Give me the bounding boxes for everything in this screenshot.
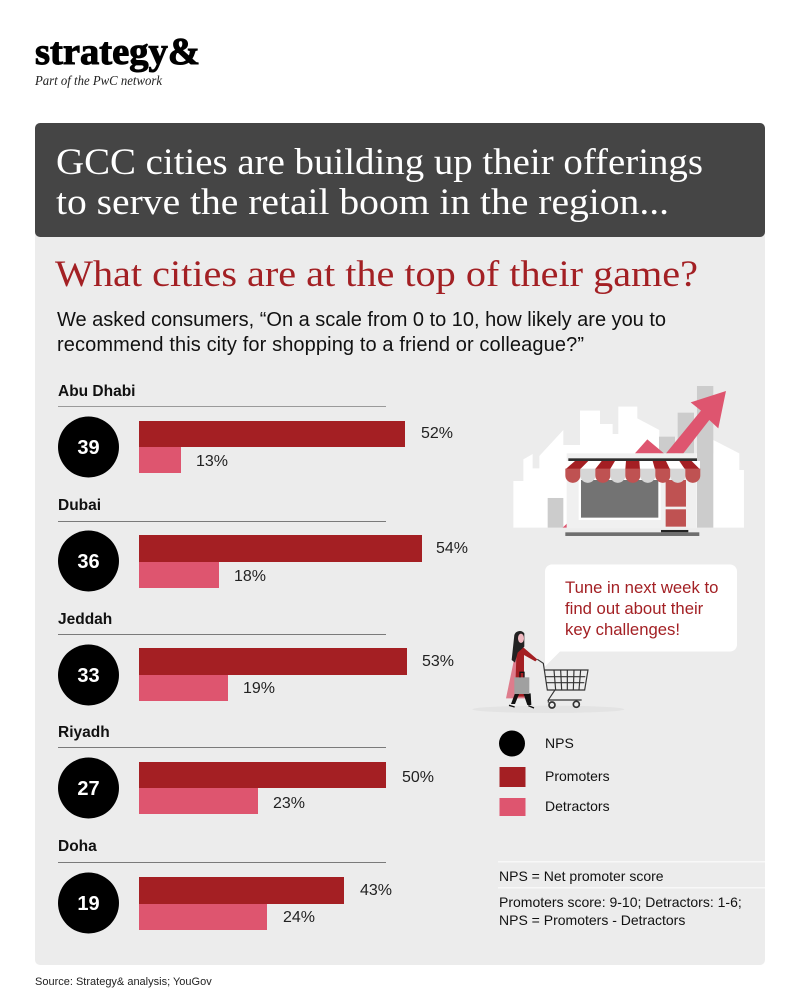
city row: Jeddah: 33 [77,665,100,687]
city row: Riyadh: 50% [402,769,434,786]
intro text: We asked consumers, “On a scale from 0 to 10, how likely are you to [57,309,666,331]
notes: NPS = Net promoter score [499,868,664,884]
city row: Abu Dhabi: 52% [421,425,453,442]
intro text: recommend this city for shopping to a friend or colleague?” [57,334,584,356]
city row: Dubai: 54% [436,540,468,557]
city row: Dubai: 18% [234,568,266,585]
city row: Dubai: Dubai [58,497,101,514]
callout: speech bubble [545,564,737,666]
callout: speech bubble: key challenges! [565,620,680,639]
title banner: to serve the retail boom in the region... [56,181,669,222]
city row: Doha: Doha [58,838,97,855]
title banner: GCC cities are building up their offerings [56,141,703,182]
main grey panel [35,200,765,965]
city row: Riyadh: 23% [273,795,305,812]
legend: Detractors [545,798,610,814]
city row: Riyadh: 27 [77,778,100,800]
city row: Doha: 24% [283,909,315,926]
city row: Doha: 19 [77,893,100,915]
intro text [57,309,666,356]
city row: Dubai: 36 [77,551,100,573]
city row: Jeddah: Jeddah [58,611,112,628]
city row: Doha: 43% [360,882,392,899]
logo: Part of the PwC network [34,73,163,88]
legend: Promoters [545,768,610,784]
subheading: What cities are at the top of their game? [55,253,698,294]
callout: speech bubble: Tune in next week to [565,578,718,597]
source: Source: Strategy& analysis; YouGov [35,976,212,988]
city row: Abu Dhabi: Abu Dhabi [58,383,136,400]
logo: strategy& [35,31,200,73]
city row: Abu Dhabi: 39 [77,437,100,459]
notes: NPS = Promoters - Detractors [499,912,685,928]
legend: NPS [545,735,574,751]
legend [499,730,610,816]
city row: Abu Dhabi: 13% [196,453,228,470]
city row: Doha [58,838,392,934]
icon: storefront with rising arrow and skyline [513,386,744,536]
title banner [35,123,765,237]
notes [498,861,765,928]
city row: Jeddah: 19% [243,680,275,697]
city row: Riyadh: Riyadh [58,724,110,741]
callout: speech bubble: find out about their [565,599,704,618]
notes: Promoters score: 9-10; Detractors: 1-6; [499,894,742,910]
icon: shopper with cart [472,631,624,713]
city row: Dubai [58,497,468,592]
city row: Jeddah [58,611,454,706]
city row: Abu Dhabi [58,383,453,478]
city row: Jeddah: 53% [422,653,454,670]
city row: Riyadh [58,724,434,818]
